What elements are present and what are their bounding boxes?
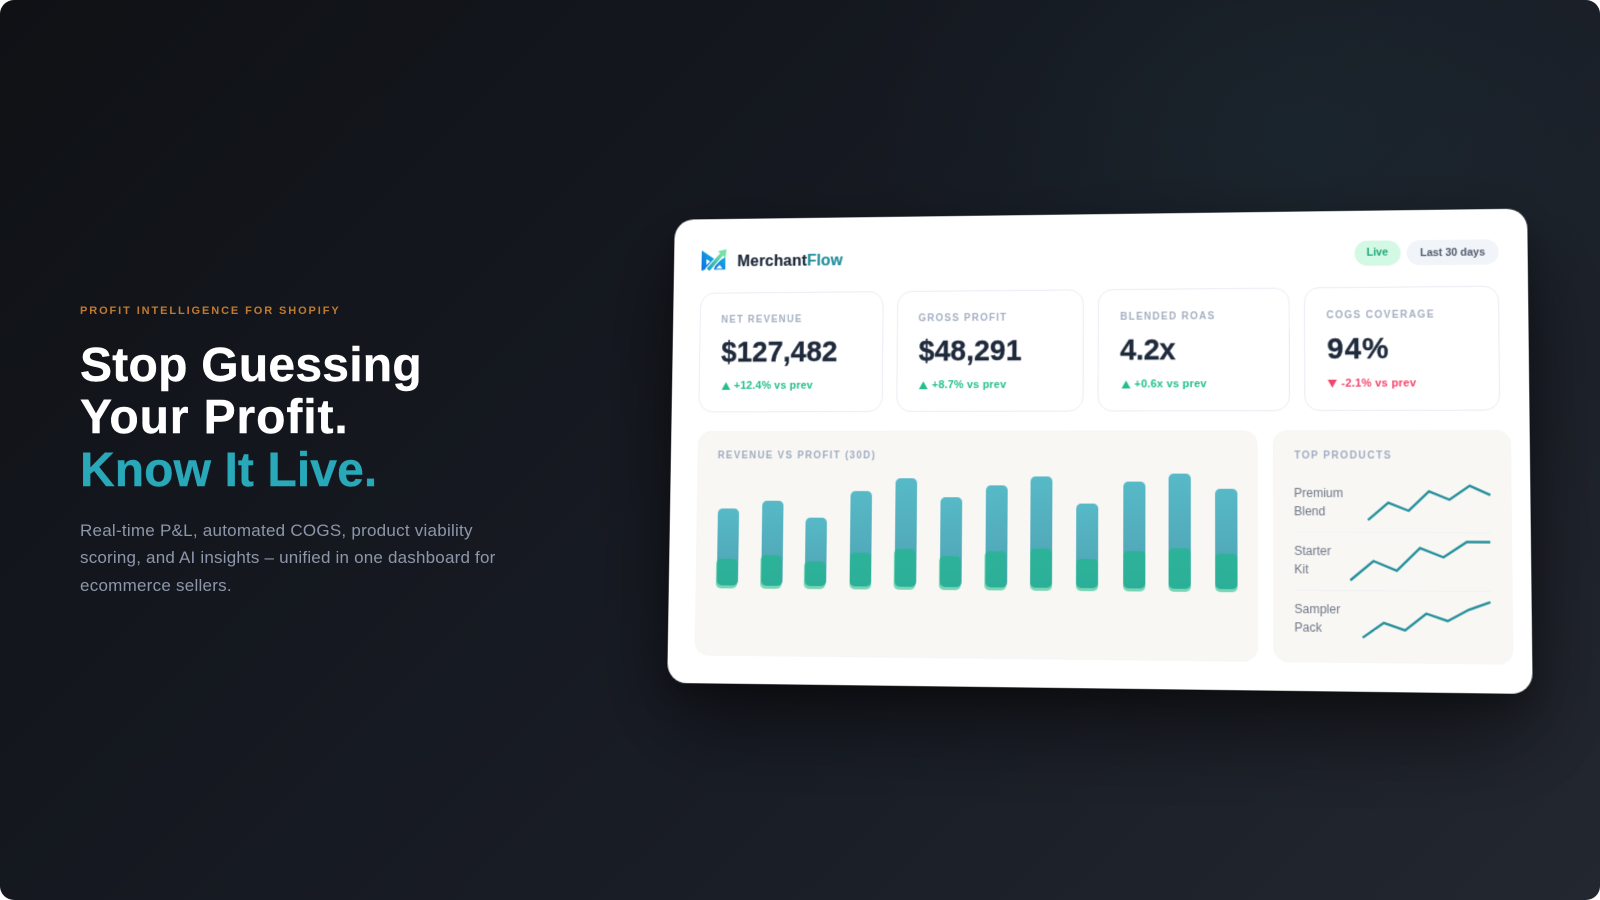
KPI card: blended ROAS: +0.6x vs prev [1134, 378, 1207, 390]
product name: Starter Kit: Starter [1294, 543, 1331, 558]
sparkline: Premium Blend [1367, 484, 1491, 522]
KPI card: COGS coverage [1303, 285, 1500, 411]
KPI card: net revenue: $127,482 [721, 336, 838, 368]
product name: Sampler Pack: Sampler [1294, 602, 1340, 616]
date range pill: Last 30 days [1420, 246, 1485, 259]
description text: Real-time P&L, automated COGS, product viability [80, 521, 473, 540]
KPI card: COGS coverage: 94% [1327, 333, 1390, 365]
KPI card: gross profit: +8.7% vs prev [932, 378, 1006, 391]
product name: Premium Blend: Premium [1294, 485, 1343, 500]
KPI card: net revenue: +12.4% vs prev [734, 379, 813, 391]
headline [80, 339, 422, 497]
sparkline: Sampler Pack [1362, 600, 1491, 639]
headline: Stop Guessing [80, 339, 422, 392]
bar chart [716, 473, 1238, 592]
description text: ecommerce sellers. [80, 576, 232, 595]
panel: revenue vs profit chart [695, 430, 1258, 662]
headline: Your Profit. [80, 391, 349, 444]
panel: top products [1272, 430, 1513, 665]
description text [80, 521, 496, 595]
KPI card: COGS coverage: -2.1% vs prev [1341, 377, 1416, 389]
KPI card: net revenue [698, 291, 883, 412]
product name: Sampler Pack [1294, 602, 1340, 635]
KPI card: blended ROAS: 4.2x [1120, 334, 1175, 366]
panel title: TOP PRODUCTS [1294, 450, 1392, 462]
status pill: Live: Live [1367, 246, 1388, 259]
date range pill [1407, 239, 1499, 265]
KPI card: gross profit [896, 289, 1084, 411]
product name: Starter Kit [1294, 543, 1370, 577]
description text: scoring, and AI insights – unified in one dashboard for [80, 548, 496, 567]
panel: dashboard card [667, 209, 1533, 694]
headline: Know It Live. [80, 444, 377, 497]
KPI card: COGS coverage: COGS COVERAGE [1326, 309, 1435, 321]
status pill: Live [1354, 240, 1401, 265]
chart title: REVENUE VS PROFIT (30D) [718, 451, 876, 461]
KPI card: gross profit: GROSS PROFIT [919, 312, 1007, 324]
brand name: MerchantFlow [737, 252, 843, 270]
product name: Premium Blend: Blend [1294, 504, 1325, 518]
product name: Starter Kit: Kit [1294, 562, 1309, 576]
product name: Sampler Pack: Pack [1294, 620, 1322, 635]
eyebrow label: PROFIT INTELLIGENCE FOR SHOPIFY [80, 305, 341, 317]
icon: MerchantFlow logo [701, 248, 727, 272]
KPI card: gross profit: $48,291 [919, 335, 1022, 367]
product name: Premium Blend [1294, 485, 1343, 518]
KPI card: blended ROAS [1098, 287, 1290, 411]
KPI card: net revenue: NET REVENUE [721, 314, 803, 325]
KPI card: blended ROAS: BLENDED ROAS [1120, 311, 1215, 322]
sparkline: Starter Kit [1349, 540, 1492, 582]
